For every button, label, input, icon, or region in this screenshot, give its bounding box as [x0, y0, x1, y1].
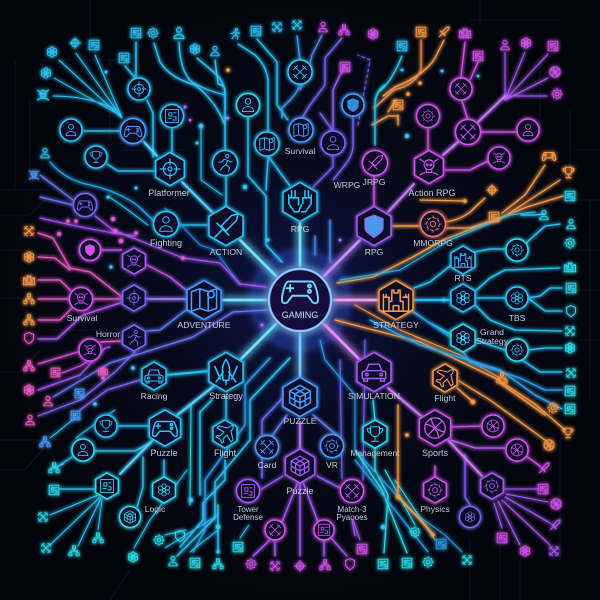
label: strategy cyan: Strategy	[209, 391, 243, 401]
icon: tree lower	[69, 546, 79, 556]
wires: cyan bottom-left branch	[50, 358, 290, 556]
icon: panel three	[565, 404, 575, 414]
wires: purple and pink left branch	[38, 175, 268, 416]
icon: hero	[211, 46, 219, 56]
icon: robot top	[319, 22, 327, 32]
label: mmorpg: MMORPG	[413, 238, 453, 248]
leaf icons: lower-right purple	[497, 463, 561, 556]
node: figure circle	[517, 119, 539, 141]
icon: gear bottom	[154, 535, 164, 545]
label: survival left: Survival	[67, 313, 97, 323]
wires: cyan top-left branch	[50, 36, 300, 285]
icon: square right	[548, 41, 558, 51]
icon: monitor teal	[378, 559, 388, 569]
icon: chest orange	[489, 212, 499, 222]
node: helmet circle	[60, 119, 82, 141]
label: rpg right: RPG	[365, 247, 384, 257]
node: skull circle large	[456, 120, 480, 144]
icon: gear teal	[565, 238, 575, 248]
icon: box bottom	[190, 558, 200, 568]
icon: shield teal	[566, 306, 576, 317]
icon: bracket	[119, 53, 129, 63]
label: strategy orange: STRATEGY	[373, 320, 419, 330]
icon: helmet magenta	[44, 396, 52, 406]
icon: table top	[339, 25, 349, 35]
node: puzzle blue	[283, 378, 317, 416]
wires: purple top-right branch	[374, 42, 548, 206]
leaf icons: lower-left cyan	[38, 389, 243, 569]
wires: purple bottom branch	[253, 340, 365, 556]
icon: flower	[190, 44, 200, 54]
label: card: Card	[258, 460, 277, 470]
icon: tower orange	[497, 373, 507, 383]
leaf icons: right cyan column	[540, 210, 576, 414]
label: platformer: Platformer	[148, 188, 190, 198]
node: racing	[142, 362, 166, 390]
icon: cluster	[93, 533, 103, 543]
icon: ball right	[550, 67, 560, 77]
icon: panel two	[565, 386, 575, 396]
label: logic: Logic	[145, 504, 166, 514]
node: rts circle	[506, 239, 528, 261]
wires: orange branch	[335, 40, 565, 535]
node: skull circle	[79, 339, 101, 361]
icon: wrench purple	[550, 520, 560, 530]
node: grand strategy	[451, 324, 475, 352]
node: trophy circle	[85, 146, 107, 168]
node: cube circle	[120, 506, 140, 528]
icon: tree blue	[40, 437, 50, 447]
icon: tower magenta	[98, 368, 108, 375]
icon: robot magenta	[270, 561, 280, 571]
label: management: Management	[351, 448, 400, 458]
icon: banner magenta	[346, 559, 354, 570]
node: pad pill circle	[74, 194, 96, 216]
label: racing: Racing	[141, 391, 168, 401]
node: puzzle purple	[285, 449, 315, 483]
label: action rpg: Action RPG	[408, 188, 456, 198]
leaf icons: right orange lower	[497, 373, 573, 450]
icon: bulb	[246, 559, 256, 569]
node: basketball circle	[506, 439, 528, 461]
node: tower defense	[236, 480, 260, 502]
icon: star orange	[24, 252, 34, 262]
leaf icons: left magenta column	[24, 333, 108, 425]
icon: cluster purple	[520, 546, 530, 556]
label: rpg top: RPG	[291, 224, 310, 234]
label: physics: Physics	[420, 504, 450, 514]
node: crossed swords circle	[288, 60, 312, 84]
icon: gear	[148, 28, 158, 38]
icon: check top	[473, 51, 483, 61]
icon: checker magenta	[357, 544, 367, 554]
icon: card	[131, 28, 141, 38]
node: rts	[451, 246, 475, 274]
icon: square	[89, 40, 99, 50]
node: target hex	[123, 285, 145, 311]
node: fighting	[154, 212, 178, 236]
node: mmorpg	[420, 212, 446, 236]
node: physics	[424, 477, 446, 503]
wires: violet upper branch	[300, 35, 370, 262]
icon: bracket blue	[75, 389, 84, 398]
scattered glowing dots	[57, 68, 528, 554]
icon: tower teal	[564, 263, 576, 272]
label: match-3: Match-3	[338, 505, 367, 514]
node: jrpg	[362, 150, 388, 176]
icon: tower top	[459, 29, 471, 38]
node: soccer ball circle	[482, 415, 504, 437]
node: run circle	[212, 150, 238, 176]
node: gear circle top right	[488, 147, 510, 169]
icon: flower left	[47, 47, 57, 57]
main spokes from hub	[223, 222, 378, 378]
label: flight cyan: Flight	[214, 448, 236, 458]
node: vr	[320, 434, 344, 458]
icon: robot	[38, 512, 48, 522]
node: adventure	[187, 280, 221, 320]
icon: helmet	[174, 27, 184, 39]
icon: ball orange	[544, 440, 554, 450]
icon: arc teal	[462, 555, 472, 565]
node: cross circle top	[450, 78, 472, 100]
icon: bow right	[566, 368, 576, 378]
leaf icons: top cyan row	[29, 20, 302, 179]
icon: ball purple	[551, 499, 561, 509]
icon: demon	[37, 90, 49, 100]
icon: square purple	[497, 533, 507, 543]
icon: trophy orange	[563, 428, 573, 438]
label: rts: RTS	[454, 273, 472, 283]
icon: rugby purple	[539, 463, 549, 473]
node: sub circle right	[314, 520, 334, 540]
node: gear circle	[460, 506, 480, 528]
node: tbs	[506, 287, 528, 309]
wires: teal bottom-right branch	[320, 340, 462, 553]
wires: cyan right branch	[340, 56, 562, 409]
node: face circle	[160, 104, 184, 128]
leaf icons: top-right orange	[393, 27, 574, 222]
node: card	[256, 436, 278, 458]
leaf icons: bottom right teal	[378, 527, 472, 569]
icon: chart orange	[416, 27, 426, 37]
icon: cross	[272, 22, 282, 32]
node: rpg top	[283, 182, 317, 222]
icon: trophy orange right	[563, 167, 574, 178]
label: match-3: Pyaooes	[336, 513, 368, 522]
node: strategy cyan	[209, 352, 243, 392]
icon: box purple	[538, 484, 548, 494]
icon: runner	[231, 28, 240, 39]
label: grand strategy: Strategy	[476, 336, 509, 346]
icon: gauge teal	[410, 527, 420, 537]
node: management	[363, 420, 387, 448]
icon: crown orange	[23, 276, 35, 285]
node: helmet circle lower	[72, 439, 94, 461]
node: cube hex right	[481, 473, 503, 499]
node: shield circle	[80, 240, 100, 260]
node: skull hex	[123, 248, 145, 274]
icon: medal orange	[487, 185, 497, 195]
icon: standing teal	[567, 219, 575, 229]
node: cube hex	[96, 473, 118, 499]
node: survival circle top	[289, 118, 313, 142]
wires: purple bottom-right branch	[435, 426, 550, 545]
icon: person teal	[540, 210, 548, 220]
leaf icons: left orange column	[23, 226, 35, 325]
label: tower defense: Tower	[237, 505, 259, 514]
node: map circle	[255, 132, 279, 156]
icon: diamond	[70, 38, 80, 48]
icon: table magenta	[320, 560, 330, 570]
icon: bulb teal	[423, 557, 433, 567]
icon: cross lower	[41, 543, 51, 553]
node: hood circle	[236, 94, 260, 116]
icon: squares	[49, 463, 59, 473]
icon: screen teal	[402, 558, 412, 568]
icon: cross purple	[549, 546, 559, 556]
icon: tree orange	[24, 294, 34, 304]
label: tbs: TBS	[509, 313, 526, 323]
label: jrpg: JRPG	[363, 177, 386, 187]
icon: cross orange	[24, 226, 34, 236]
icon: gamepad orange top	[393, 100, 403, 110]
icon: flask	[51, 368, 60, 377]
icon: person right	[501, 40, 509, 50]
label: adventure: ADVENTURE	[177, 320, 231, 330]
icon: invader	[41, 148, 49, 158]
label: flight orange: Flight	[434, 393, 456, 403]
icon: robot bottom	[169, 556, 177, 566]
icon: bag	[251, 26, 261, 36]
hub: gaming	[269, 269, 331, 331]
icon: bulb right	[552, 89, 562, 99]
node: puzzle cyan	[149, 410, 181, 446]
icon: joystick	[24, 361, 34, 371]
label: simulation: SIMULATION	[348, 391, 400, 401]
node: simulation	[357, 352, 391, 392]
node: action	[209, 206, 243, 246]
icon: case bottom	[233, 542, 243, 552]
label: puzzle cyan: Puzzle	[150, 448, 178, 458]
hub label: GAMING	[282, 310, 318, 320]
icon: bed blue	[71, 411, 80, 420]
icon: plus	[41, 68, 51, 78]
central halo	[250, 250, 350, 350]
icon: target magenta	[295, 561, 305, 571]
label: tower defense: Defense	[233, 513, 263, 522]
node: horror hex	[123, 325, 145, 351]
icon: plus right	[521, 38, 531, 48]
icon: cross two	[292, 20, 302, 30]
icon: pin magenta	[26, 415, 34, 425]
node: platformer	[156, 152, 184, 186]
node: crosshair circle	[128, 78, 150, 100]
icon: card top	[340, 62, 350, 72]
icon: ship bottom	[213, 559, 223, 569]
node: rpg right	[357, 206, 391, 246]
icon: panel teal	[566, 283, 576, 293]
label: fighting: Fighting	[150, 238, 182, 248]
node: shield circle top	[342, 94, 364, 116]
node: match-3	[340, 480, 364, 502]
node: action rpg	[415, 150, 443, 184]
node: upper rpg circle	[416, 104, 440, 128]
node: survival skull	[70, 288, 92, 310]
node: sports	[419, 410, 451, 446]
icon: flower magenta	[24, 385, 34, 395]
icon: monitor	[49, 485, 59, 495]
icon: flame orange	[548, 403, 558, 413]
label: horror: Horror	[96, 329, 120, 339]
node: strategy orange	[379, 280, 413, 320]
icon: badge bottom	[176, 531, 184, 542]
icon: cross teal	[436, 539, 446, 549]
leaf icons: top purple row	[319, 22, 562, 99]
label: grand strategy: Grand	[480, 327, 504, 337]
label: sports: Sports	[422, 448, 449, 458]
icon: tree orange two	[24, 315, 34, 325]
icon: gamepad orange right	[542, 152, 556, 161]
icon: feather orange	[439, 27, 449, 37]
node: wrpg	[321, 131, 345, 155]
label: wrpg: WRPG	[334, 180, 361, 190]
label: survival top: Survival	[285, 146, 315, 156]
node: grand strategy circle	[506, 339, 528, 361]
label: puzzle caps: PUZZLE	[284, 416, 317, 426]
node: flight orange	[433, 364, 457, 392]
label: vr: VR	[326, 460, 338, 470]
icon: cross right	[565, 326, 575, 336]
node: sub circle left	[265, 520, 285, 540]
icon: badge	[24, 333, 34, 344]
node: gamepad circle	[120, 118, 146, 144]
node: hex network	[451, 284, 475, 312]
leaf icon: teal card top	[397, 41, 407, 51]
icon: flower top	[368, 29, 378, 39]
leaf icon: teal panel right	[565, 191, 575, 201]
node: flight cyan	[213, 420, 237, 448]
icon: flower right	[565, 343, 575, 353]
label: action: ACTION	[210, 247, 242, 257]
icon: shield bottom	[128, 552, 138, 562]
label: puzzle purple: Puzzle	[286, 486, 314, 496]
icon: demon small	[29, 171, 39, 179]
node: logic	[153, 477, 175, 503]
wires: diagonal outer spokes	[120, 96, 505, 476]
node: trophy circle left	[95, 415, 117, 437]
leaf icons: bottom magenta	[246, 544, 367, 571]
